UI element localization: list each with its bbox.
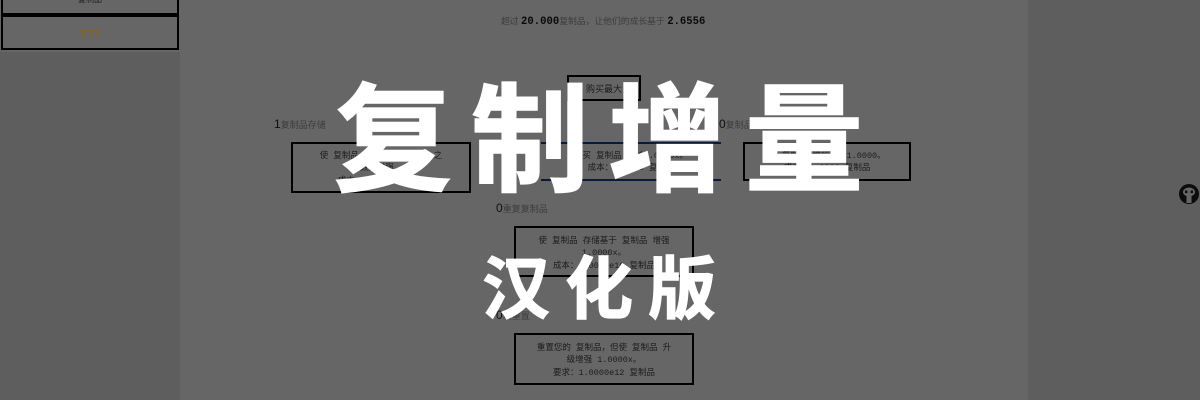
summary line: 超过 20.000复制品，让他们的成长基于 2.6556 bbox=[501, 16, 705, 28]
upgrade box: repeat bbox=[514, 226, 694, 277]
button: buy max bbox=[567, 75, 641, 101]
label: reset: 0次重置 bbox=[496, 308, 530, 322]
button: buy max: 购买最大 bbox=[586, 84, 622, 94]
upgrade box: growth bbox=[541, 142, 721, 181]
sidebar button: upper tab bbox=[1, 0, 179, 15]
sidebar button: locked tab: ??? bbox=[79, 27, 101, 41]
upgrade box: reset: 要求：1.0000e12 复制品 bbox=[553, 368, 655, 378]
main panel background bbox=[180, 0, 1028, 400]
upgrade box: reset: 级增强 1.0000x。 bbox=[567, 355, 641, 365]
upgrade box: multiplier: 成本：1.0000 复制品 bbox=[784, 163, 870, 173]
subtitle: 汉化版 bbox=[482, 252, 731, 328]
upgrade box: repeat: 使 复制品 存储基于 复制品 增强 bbox=[539, 236, 669, 246]
label: replicanti storage: 1复制品存储 bbox=[274, 117, 326, 131]
upgrade box: reset bbox=[514, 333, 694, 385]
label: replicanti multiplier: 0复制品增幅 bbox=[719, 117, 771, 131]
upgrade box: repeat: 成本：1.0000e16 复制品 bbox=[553, 261, 655, 271]
title: 复制增量 bbox=[334, 76, 882, 208]
upgrade box: growth: 成本：673.69 复制品 bbox=[588, 163, 674, 173]
upgrade box: repeat: 1.0000x。 bbox=[582, 248, 626, 258]
upgrade box: storage: 数量增强， bbox=[360, 163, 402, 173]
sidebar panel bbox=[0, 0, 180, 52]
sidebar button: locked tab bbox=[1, 15, 179, 50]
upgrade box: multiplier: 使 复制品 增幅基于1.0000。 bbox=[768, 151, 886, 161]
upgrade box: multiplier bbox=[743, 142, 911, 181]
upgrade box: storage: 使 复制品 存储基于 复制品 之 bbox=[320, 151, 442, 161]
upgrade box: reset: 重置您的 复制品，但使 复制品 升 bbox=[537, 343, 671, 353]
upgrade box: storage: 成本：1.0000 复制品 bbox=[338, 176, 424, 186]
label: repeat replicanti: 0重复复制品 bbox=[496, 201, 548, 215]
upgrade box: growth: 购买 复制品 成长1.0000x。 bbox=[574, 151, 688, 161]
icon: github bbox=[1179, 184, 1199, 204]
upgrade box: storage bbox=[291, 142, 471, 193]
